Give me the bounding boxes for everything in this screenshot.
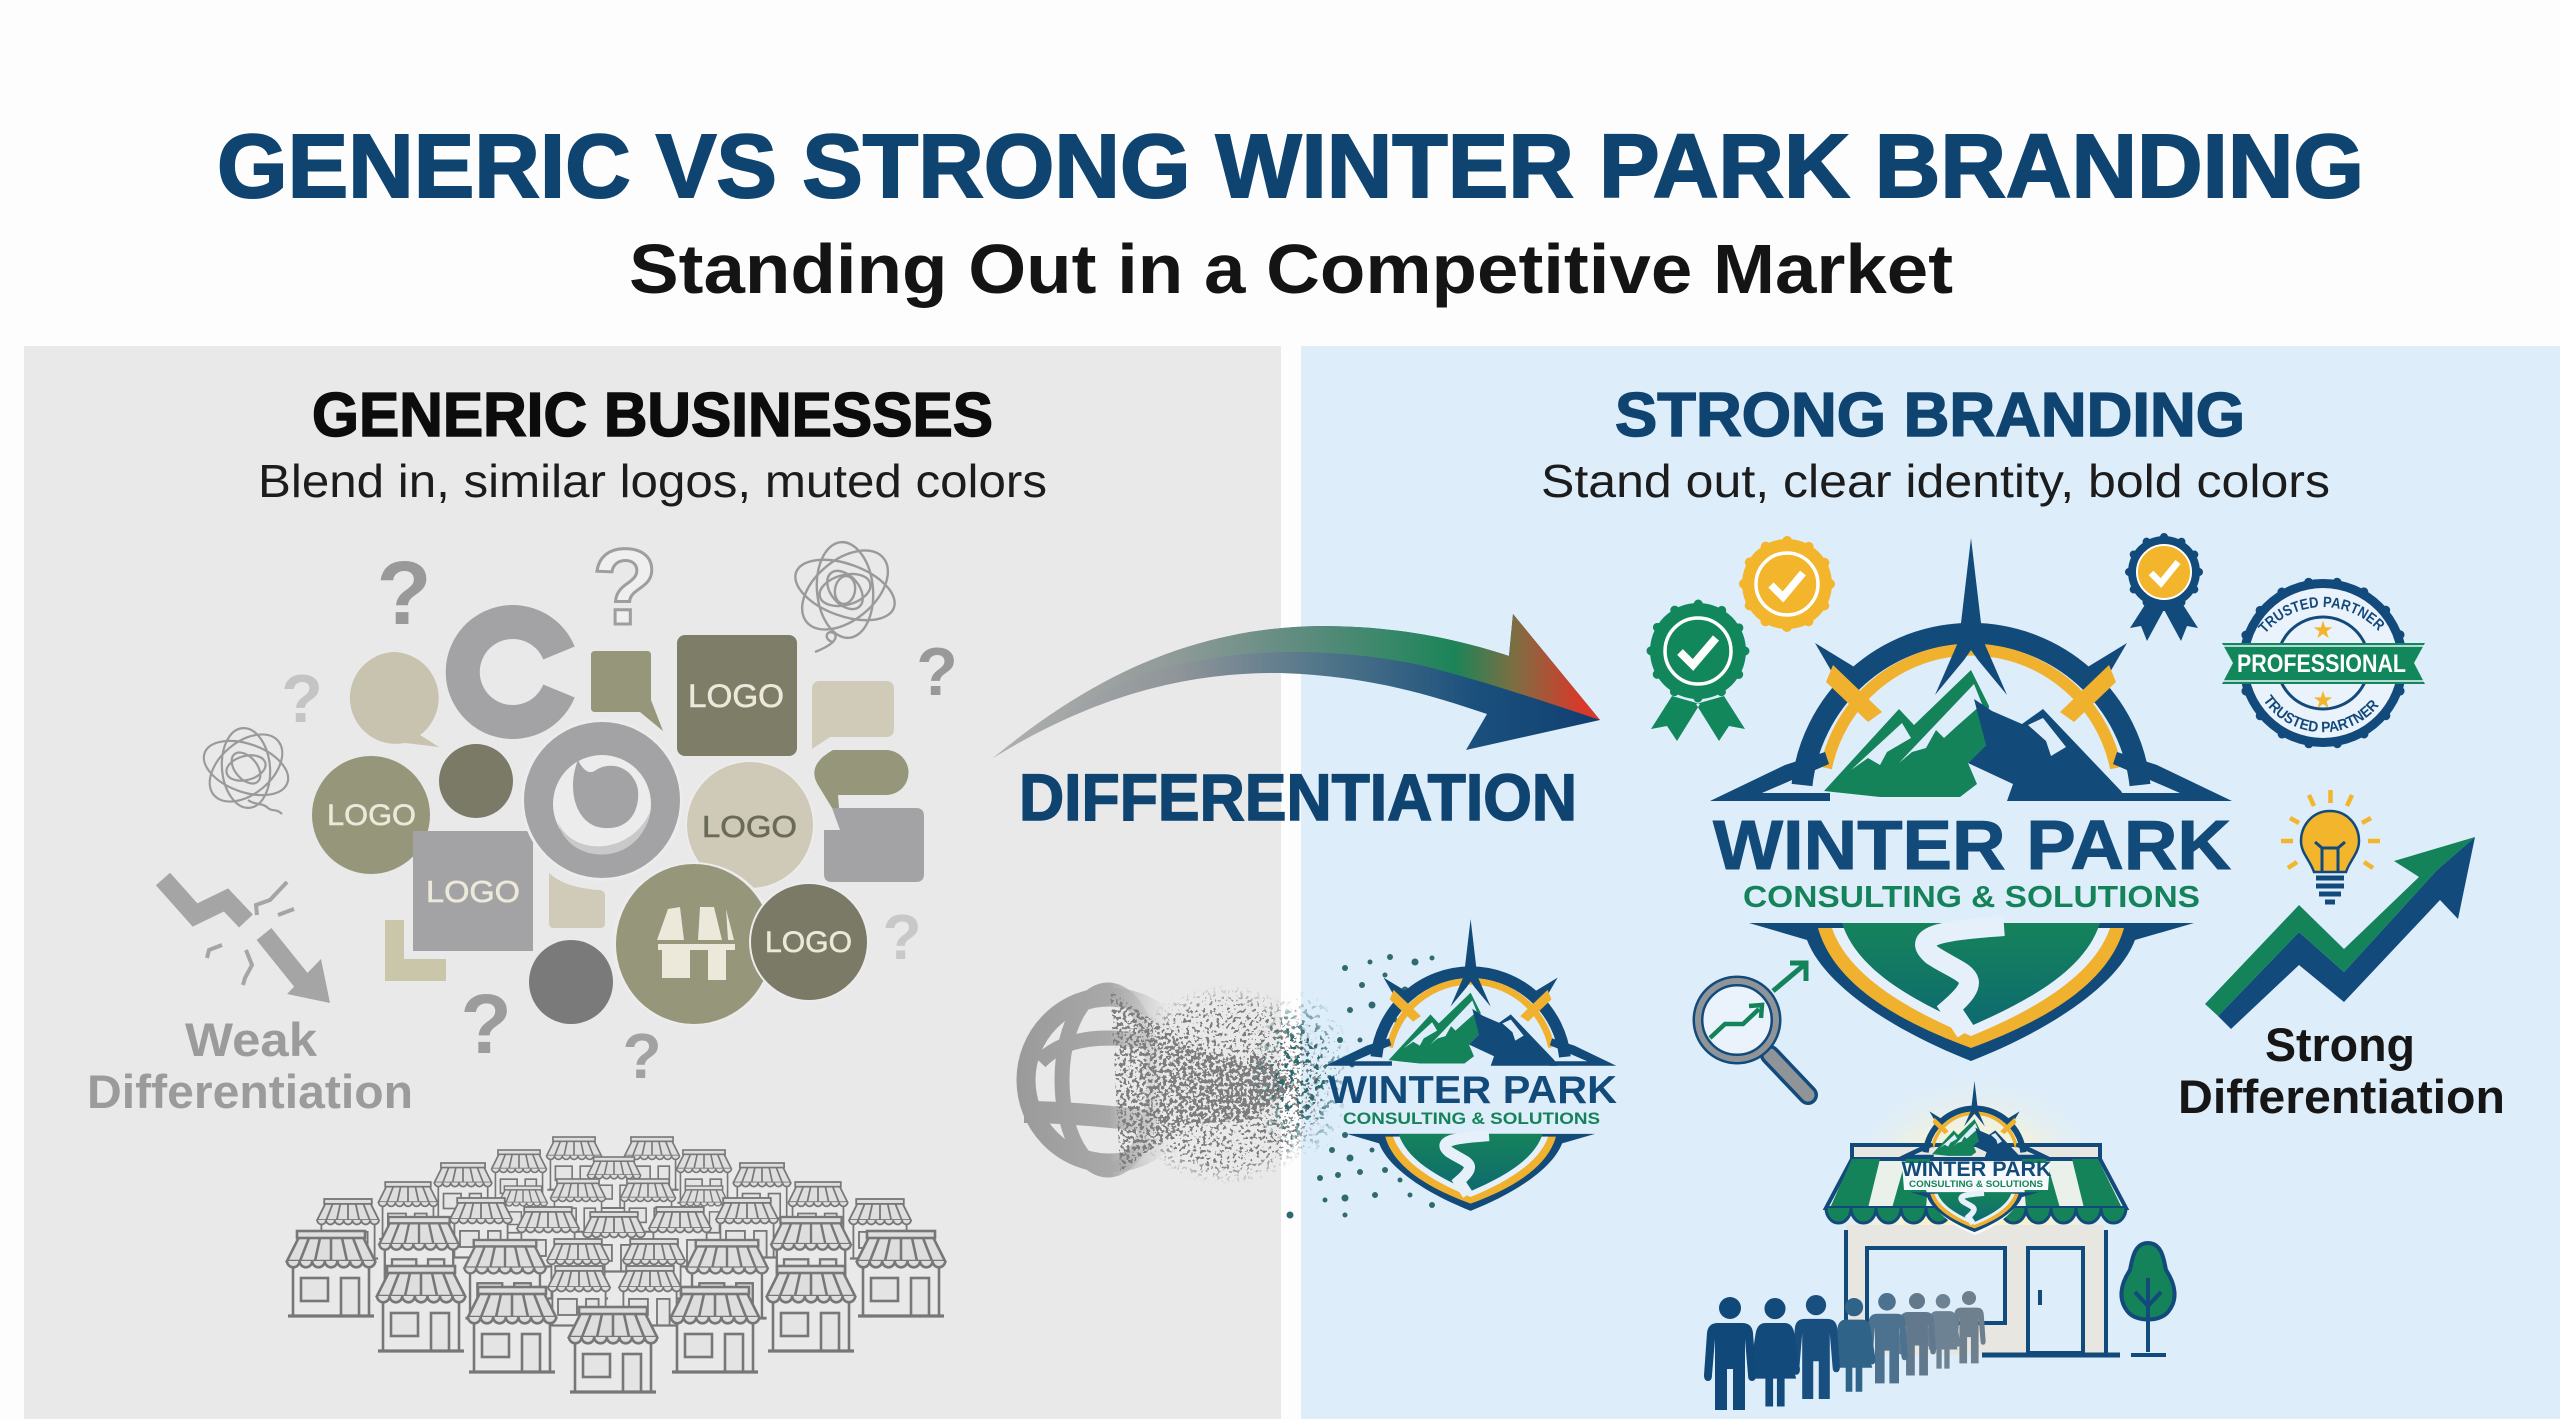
gray bubble square (824, 808, 924, 882)
badge: trusted partner professional seal: TRUSTED PARTNER (2258, 596, 2384, 632)
small winter park logo (1325, 919, 1617, 1211)
question marks: ? (460, 977, 512, 1071)
badge: gold rosette (1742, 539, 1832, 629)
label: strong differentiation: Differentiation (2178, 1070, 2505, 1123)
label: weak differentiation: Differentiation (87, 1065, 413, 1118)
icon: rising green and navy arrow (2205, 837, 2475, 1029)
question marks: ? (916, 634, 958, 710)
badge: trusted partner professional seal (2222, 578, 2425, 748)
title: GENERIC VS STRONG WINTER PARK BRANDING (217, 117, 2364, 217)
olive pill bubble (814, 750, 908, 821)
question marks: ? (882, 901, 922, 973)
heading: generic businesses: GENERIC BUSINESSES (312, 381, 993, 450)
badge: trusted partner professional seal: ★ (2312, 617, 2334, 644)
subheading: generic businesses: Blend in, similar logos, muted colors (258, 455, 1047, 507)
olive logo circle (312, 756, 430, 874)
beige logo circle (685, 760, 815, 890)
storefront glow (1825, 1070, 2125, 1360)
differentiation arrow (993, 614, 1600, 758)
question marks: ? (377, 544, 431, 644)
particles: teal cloud and scattered dots (1215, 935, 1435, 1218)
label: strong differentiation (2178, 1018, 2505, 1123)
store building (1846, 1225, 2120, 1355)
beige logo circle: LOGO (702, 809, 797, 844)
swirl ring logo (521, 719, 683, 881)
main winter park logo (1710, 538, 2232, 1061)
subtitle: Standing Out in a Competitive Market (629, 230, 1953, 308)
store logo: WINTER PARK (1902, 1158, 2052, 1181)
question marks: ? (281, 661, 323, 737)
heading: strong branding: STRONG BRANDING (1615, 381, 2245, 450)
beige rounded bubble (812, 681, 894, 749)
label: strong differentiation: Strong (2265, 1018, 2415, 1071)
gray logo square (413, 831, 533, 951)
question marks: ? (622, 1020, 662, 1092)
beige L shape (385, 920, 446, 981)
beige speech bubble (350, 652, 439, 747)
question marks (281, 526, 958, 1092)
gray logo square: LOGO (426, 874, 520, 909)
panel: strong branding background (1301, 346, 2560, 1419)
store awning (1826, 1145, 2126, 1223)
particles: gray arrow (1110, 990, 1297, 1172)
label: weak differentiation (87, 1013, 413, 1118)
badge: trusted partner professional seal: PROFESSIONAL (2237, 650, 2406, 678)
dark circle (439, 744, 513, 818)
olive speech square (591, 651, 663, 731)
generic storefront cluster (287, 1137, 945, 1392)
badge: green rosette (1650, 603, 1746, 741)
dark gray circle (529, 940, 613, 1024)
particles: gray cloud (1090, 960, 1360, 1210)
store logo (1899, 1081, 2052, 1235)
icon: scribble top (787, 535, 903, 652)
badge: trusted partner professional seal: ★ (2312, 687, 2334, 714)
generic logo cluster (196, 526, 958, 1092)
store logo: CONSULTING & SOLUTIONS (1909, 1179, 2043, 1190)
olive store circle (612, 862, 776, 1026)
letter C mark (463, 622, 559, 722)
dark logo circle: LOGO (765, 926, 852, 959)
queue of customers (1704, 1291, 1986, 1410)
dissolving generic globe (1024, 960, 1360, 1210)
dark logo circle (749, 882, 869, 1002)
badge: navy ribbon rosette (2128, 536, 2200, 641)
panel: generic businesses background (24, 346, 1281, 1419)
broken downward arrow (163, 879, 330, 1003)
icon: light bulb (2281, 790, 2380, 902)
badge: trusted partner professional seal: TRUSTED PARTNER (2264, 694, 2379, 732)
dark logo square (677, 635, 797, 756)
question marks: ? (592, 526, 658, 647)
icon: scribble left (196, 721, 296, 815)
dark logo square: LOGO (688, 678, 784, 714)
small winter park logo: CONSULTING & SOLUTIONS (1343, 1109, 1600, 1128)
strong storefront (1704, 1081, 2175, 1410)
icon: tree (2121, 1243, 2175, 1355)
small winter park logo: WINTER PARK (1328, 1069, 1617, 1112)
icon: white store (657, 907, 735, 980)
beige small bubble (549, 873, 605, 928)
subheading: strong branding: Stand out, clear identity, bold colors (1541, 455, 2330, 507)
olive logo circle: LOGO (327, 799, 416, 832)
icon: magnifying glass with growth chart (1698, 963, 1808, 1095)
label: differentiation: DIFFERENTIATION (1019, 760, 1577, 834)
main winter park logo: CONSULTING & SOLUTIONS (1743, 879, 2200, 914)
label: weak differentiation: Weak (185, 1013, 318, 1066)
main winter park logo: WINTER PARK (1713, 806, 2231, 884)
